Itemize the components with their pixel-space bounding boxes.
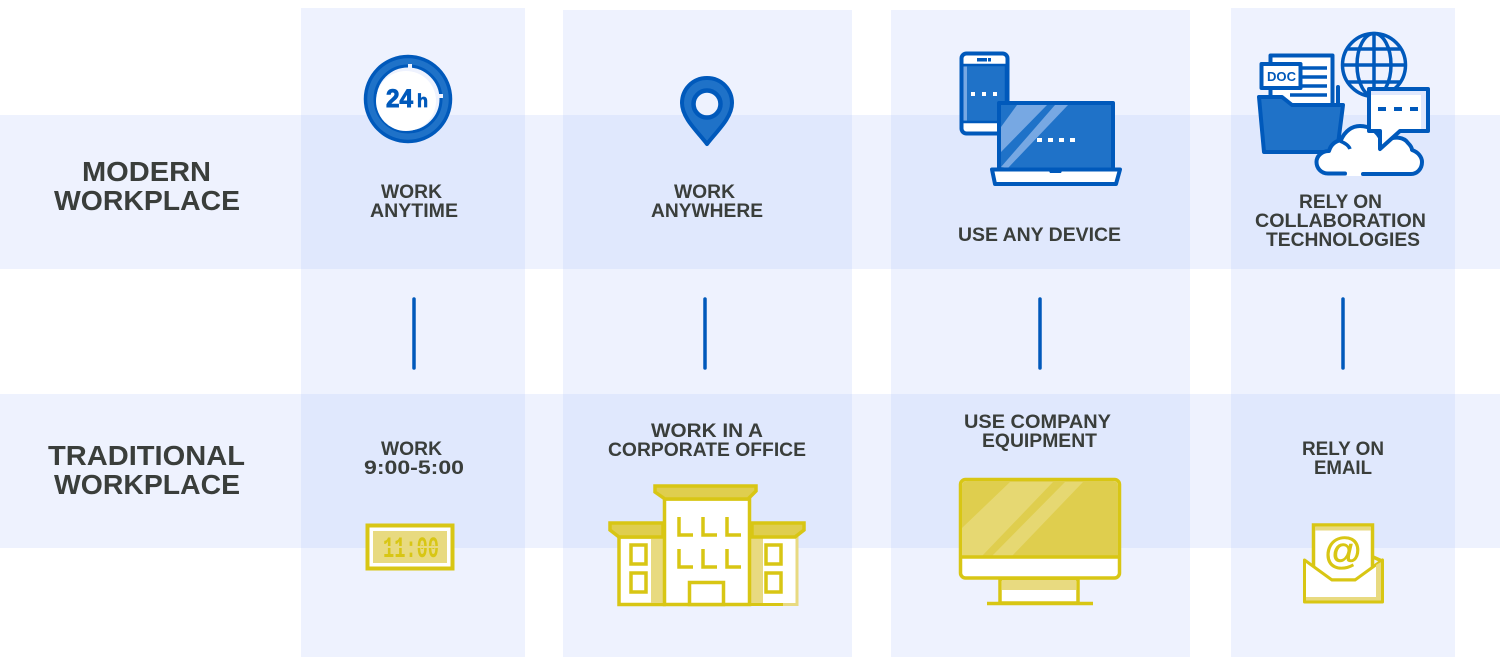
band: modern workplace row [0,115,1500,269]
label: rely on collaboration technologies: RELY ON [1299,192,1382,213]
icon: open email envelope [1304,525,1382,602]
cloud [1316,126,1422,176]
label: work anywhere: WORK [674,182,735,203]
laptop [992,103,1120,184]
heading: traditional workplace: WORKPLACE [54,469,240,500]
label: work in a corporate office: WORK IN A [651,421,763,442]
icon: digital clock [368,526,452,568]
label: work anywhere: ANYWHERE [651,201,763,222]
label: rely on collaboration technologies: COLLABORATION [1255,211,1426,232]
icon: 24 hour clock [366,56,450,142]
label: work in a corporate office: CORPORATE OFFICE [608,440,806,461]
label: use any device: USE ANY DEVICE [958,225,1121,246]
heading: modern workplace: WORKPLACE [54,185,240,216]
label: rely on email: EMAIL [1314,458,1372,479]
column backgrounds [301,8,1455,657]
icon: location pin [682,78,732,144]
icon: digital clock: 11:00 [383,533,439,567]
icon: office building [610,486,804,604]
heading: traditional workplace: TRADITIONAL [48,440,245,471]
label: use company equipment [964,412,1111,452]
heading: traditional workplace [48,440,245,500]
label: work anytime: WORK [381,182,442,203]
heading: modern workplace: MODERN [82,156,211,187]
label: work 9:00-5:00 [364,439,464,479]
label: work anywhere [651,182,763,222]
folder [1259,97,1343,152]
label: use company equipment: EQUIPMENT [982,431,1097,452]
label: work 9:00-5:00: WORK [381,439,442,460]
left wing [610,523,664,604]
heading: modern workplace [54,156,240,216]
icon: open email envelope: @ [1324,531,1362,573]
label: work anytime: ANYTIME [370,201,458,222]
band: traditional workplace row [0,394,1500,548]
row and column overlaps [301,115,1455,548]
speech bubble [1369,89,1428,149]
document [1270,56,1338,106]
DOC tag: DOC [1267,70,1296,84]
connector lines [414,299,1343,368]
label: rely on collaboration technologies [1255,192,1426,251]
icon: 24 hour clock: h [417,91,428,111]
phone [962,54,1008,134]
label: use company equipment: USE COMPANY [964,412,1111,433]
label: rely on collaboration technologies: TECHNOLOGIES [1266,230,1420,251]
label: work anytime [370,182,458,222]
icon: phone and laptop [962,54,1120,184]
label: work 9:00-5:00: 9:00-5:00 [364,458,464,479]
DOC tag [1262,64,1300,88]
icon: collaboration technologies [1259,33,1428,176]
right wing [750,523,804,604]
globe [1342,33,1406,97]
label: rely on email: RELY ON [1302,439,1384,460]
icon: 24 hour clock: 24 [386,85,413,113]
icon: desktop monitor [960,480,1120,604]
label: work in a corporate office [608,421,806,461]
central tower [655,486,756,604]
label: rely on email [1302,439,1384,479]
